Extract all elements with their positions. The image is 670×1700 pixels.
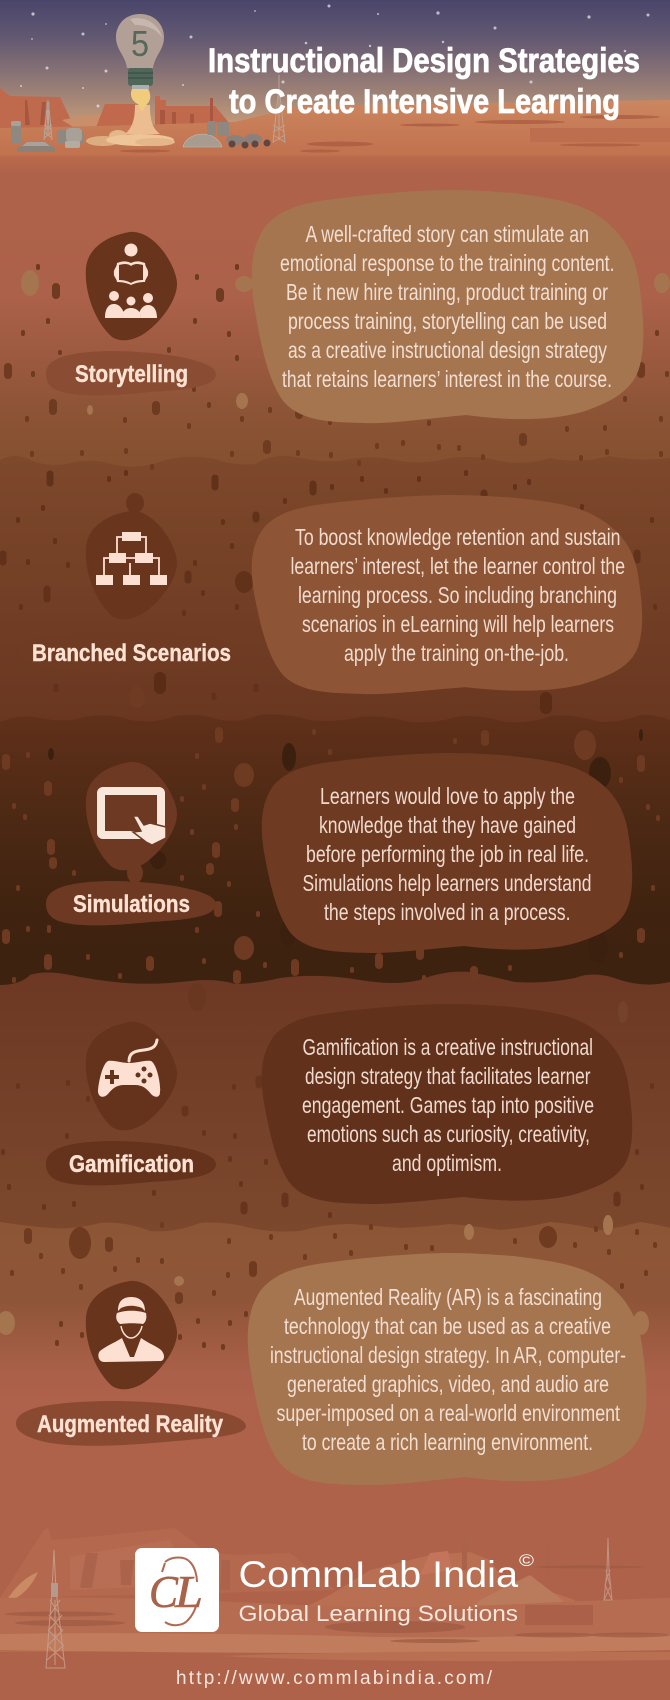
bubble: [252, 495, 642, 694]
logo: [135, 1548, 219, 1632]
panel: branched scenarios: [16, 493, 642, 694]
soil rocks: deep layer dark: [48, 729, 643, 963]
label pill: [46, 351, 216, 395]
icon: rovers: [226, 134, 270, 148]
description: A well-crafted story can stimulate an: [306, 221, 589, 247]
ground: [0, 100, 670, 175]
icon blob: [86, 762, 177, 883]
mesas: [0, 88, 235, 130]
footer landscape: [0, 1528, 670, 1668]
icon: right tower: [604, 1538, 612, 1600]
icon: right tower: [273, 75, 285, 143]
soil rocks: second layer: [3, 472, 655, 708]
mesas: [0, 1528, 575, 1610]
soil rocks: top layer: [8, 266, 667, 468]
logo letters: C: [149, 1566, 179, 1617]
icon: branching diagram: [96, 532, 167, 585]
description: Learners would love to apply the: [320, 783, 575, 809]
icon: flame: [131, 89, 150, 112]
soil rocks: deep layer: [6, 730, 658, 981]
description: [302, 1034, 594, 1176]
icon: left base buildings: [11, 121, 84, 152]
website url: http://www.commlabindia.com/: [176, 1668, 493, 1689]
description: [290, 524, 625, 666]
icon: game controller: [98, 1040, 160, 1097]
copyright mark: ©: [519, 1551, 535, 1570]
icon: left tower: [46, 1550, 65, 1668]
header scene: [0, 0, 670, 175]
label: Simulations: [73, 891, 190, 918]
bubble: [262, 753, 632, 953]
panel: simulations: [46, 753, 632, 953]
shadows: [5, 1566, 670, 1643]
icon blob: [86, 232, 177, 340]
label pill: [46, 881, 216, 925]
description: apply the training on-the-job.: [344, 640, 569, 666]
icon blob: [86, 1281, 177, 1389]
icon blob: [86, 493, 177, 619]
sky: [0, 0, 670, 130]
icon: person with VR headset: [98, 1297, 164, 1362]
description: [280, 221, 614, 392]
label: Branched Scenarios: [32, 640, 231, 667]
ground bands: [0, 1597, 670, 1652]
soil rocks: fourth layer: [3, 983, 652, 1216]
label pill: [16, 1401, 246, 1446]
icon: silos: [207, 121, 229, 136]
ground stripes: [120, 115, 660, 152]
icon: smoke cloud: [86, 105, 175, 146]
soil rocks: top layer light: [21, 270, 670, 415]
tagline: Global Learning Solutions: [238, 1601, 518, 1626]
icon: teacher with book and audience: [105, 244, 157, 318]
logo: L: [174, 1566, 203, 1617]
brand name: CommLab India: [238, 1554, 518, 1595]
soil rocks: fifth layer: [12, 1224, 655, 1348]
stars: [20, 4, 650, 116]
bubble: [262, 1004, 632, 1204]
label: Gamification: [69, 1151, 194, 1178]
bulb number: 5: [131, 23, 149, 64]
panel: augmented reality: [16, 1253, 646, 1485]
bubble: [248, 1253, 646, 1485]
soil rocks: fifth layer light: [0, 1215, 649, 1335]
bubble: [252, 190, 643, 423]
icon: dome: [183, 134, 222, 147]
description: knowledge that they have gained: [319, 812, 576, 838]
description: [302, 783, 592, 925]
icon blob: [86, 1022, 177, 1130]
description: before performing the job in real life.: [306, 841, 589, 867]
panel: gamification: [46, 1004, 632, 1204]
description: [270, 1284, 626, 1455]
description: the steps involved in a process.: [324, 899, 570, 925]
icon: light bulb rocket: [116, 14, 164, 89]
icon: left tower: [44, 100, 52, 140]
icon: tablet with pointing hand: [101, 791, 166, 845]
label: Augmented Reality: [37, 1411, 224, 1438]
title: [208, 42, 640, 121]
logo swoosh: [162, 1558, 197, 1625]
description: and optimism.: [392, 1150, 502, 1176]
label pill: [16, 632, 240, 672]
logo badge: [135, 1548, 219, 1632]
label pill: [46, 1141, 216, 1185]
label: Storytelling: [75, 361, 188, 388]
panel: storytelling: [46, 190, 643, 423]
